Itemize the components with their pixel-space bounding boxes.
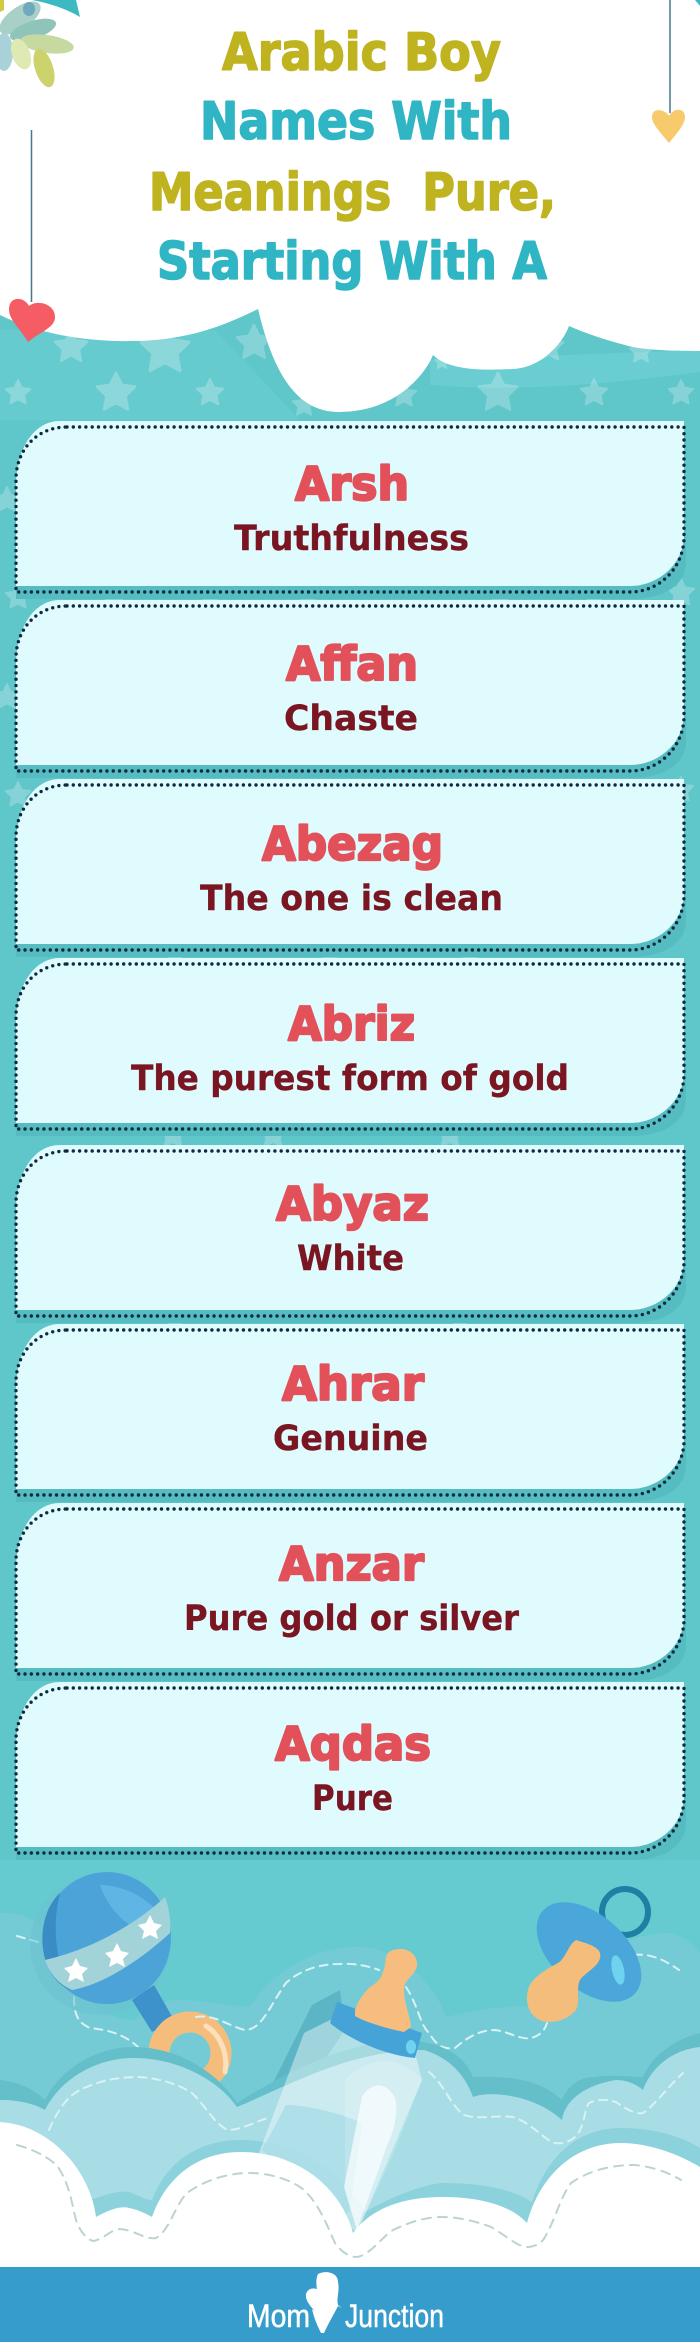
hanging heart: gold: [652, 0, 700, 143]
cloud layer: light blue: [0, 2047, 700, 2270]
card: Affan: [16, 600, 686, 778]
dashed line: upper left: [17, 1936, 138, 2047]
dashed line: across the middle: [196, 1955, 679, 2048]
card: Aqdas: [16, 1682, 686, 1860]
logo: mother and baby silhouette: [306, 2272, 342, 2333]
card: Ahrar: [16, 1324, 686, 1502]
decoration: watercolor leaves and bunting: [0, 0, 80, 90]
card: Abriz: Abriz: [288, 997, 415, 1051]
card: Abyaz: Abyaz: [276, 1177, 429, 1231]
card: Anzar: [16, 1503, 686, 1681]
top white cloud: [0, 0, 700, 412]
bottom scene backdrop: [0, 1860, 700, 2270]
hanging heart: red: [9, 130, 55, 342]
card: Abyaz: White: [297, 1239, 404, 1279]
card: Anzar: Pure gold or silver: [184, 1599, 520, 1639]
logo: wordmark: Junction: [345, 2298, 444, 2334]
card: Arsh: Truthfulness: [234, 519, 469, 559]
bottle shadow: [237, 1990, 345, 2155]
card: Affan: Chaste: [284, 699, 418, 739]
dashed lines on clouds: [49, 2072, 683, 2143]
white clouds foreground: [0, 2122, 700, 2270]
card: Abezag: Abezag: [262, 817, 443, 871]
card: Abriz: The purest form of gold: [131, 1059, 569, 1099]
card: Ahrar: Ahrar: [282, 1357, 424, 1411]
card: Abezag: [16, 779, 686, 957]
icon: rattle: [30, 1872, 226, 2084]
title: Meanings Pure,: [149, 163, 556, 223]
title: Arabic Boy: [222, 23, 501, 83]
card: Anzar: Anzar: [279, 1537, 424, 1591]
dashed line: white clouds: [17, 2145, 681, 2257]
footer bar with logo: [0, 2267, 700, 2342]
title: Names With: [200, 92, 512, 152]
title: [149, 23, 556, 292]
cloud band behind: [0, 2033, 700, 2270]
icon: baby bottle: [259, 1949, 422, 2233]
back cloud layer: [0, 1913, 700, 2270]
cloud band around white clouds: [90, 2128, 700, 2270]
card: Aqdas: Pure: [312, 1779, 393, 1819]
card: Abezag: The one is clean: [200, 879, 503, 919]
card: Affan: Affan: [286, 637, 418, 691]
card: Aqdas: Aqdas: [275, 1717, 431, 1771]
card: Abyaz: [16, 1145, 686, 1323]
card: Arsh: Arsh: [295, 457, 409, 511]
card: Ahrar: Genuine: [273, 1419, 428, 1459]
card: Arsh: [16, 421, 686, 599]
card: Abriz: [16, 958, 686, 1136]
logo: wordmark: Mom: [247, 2298, 310, 2334]
title: Starting With A: [157, 232, 547, 292]
icon: pacifier: [518, 1883, 660, 2022]
logo: wordmark: [247, 2298, 444, 2334]
